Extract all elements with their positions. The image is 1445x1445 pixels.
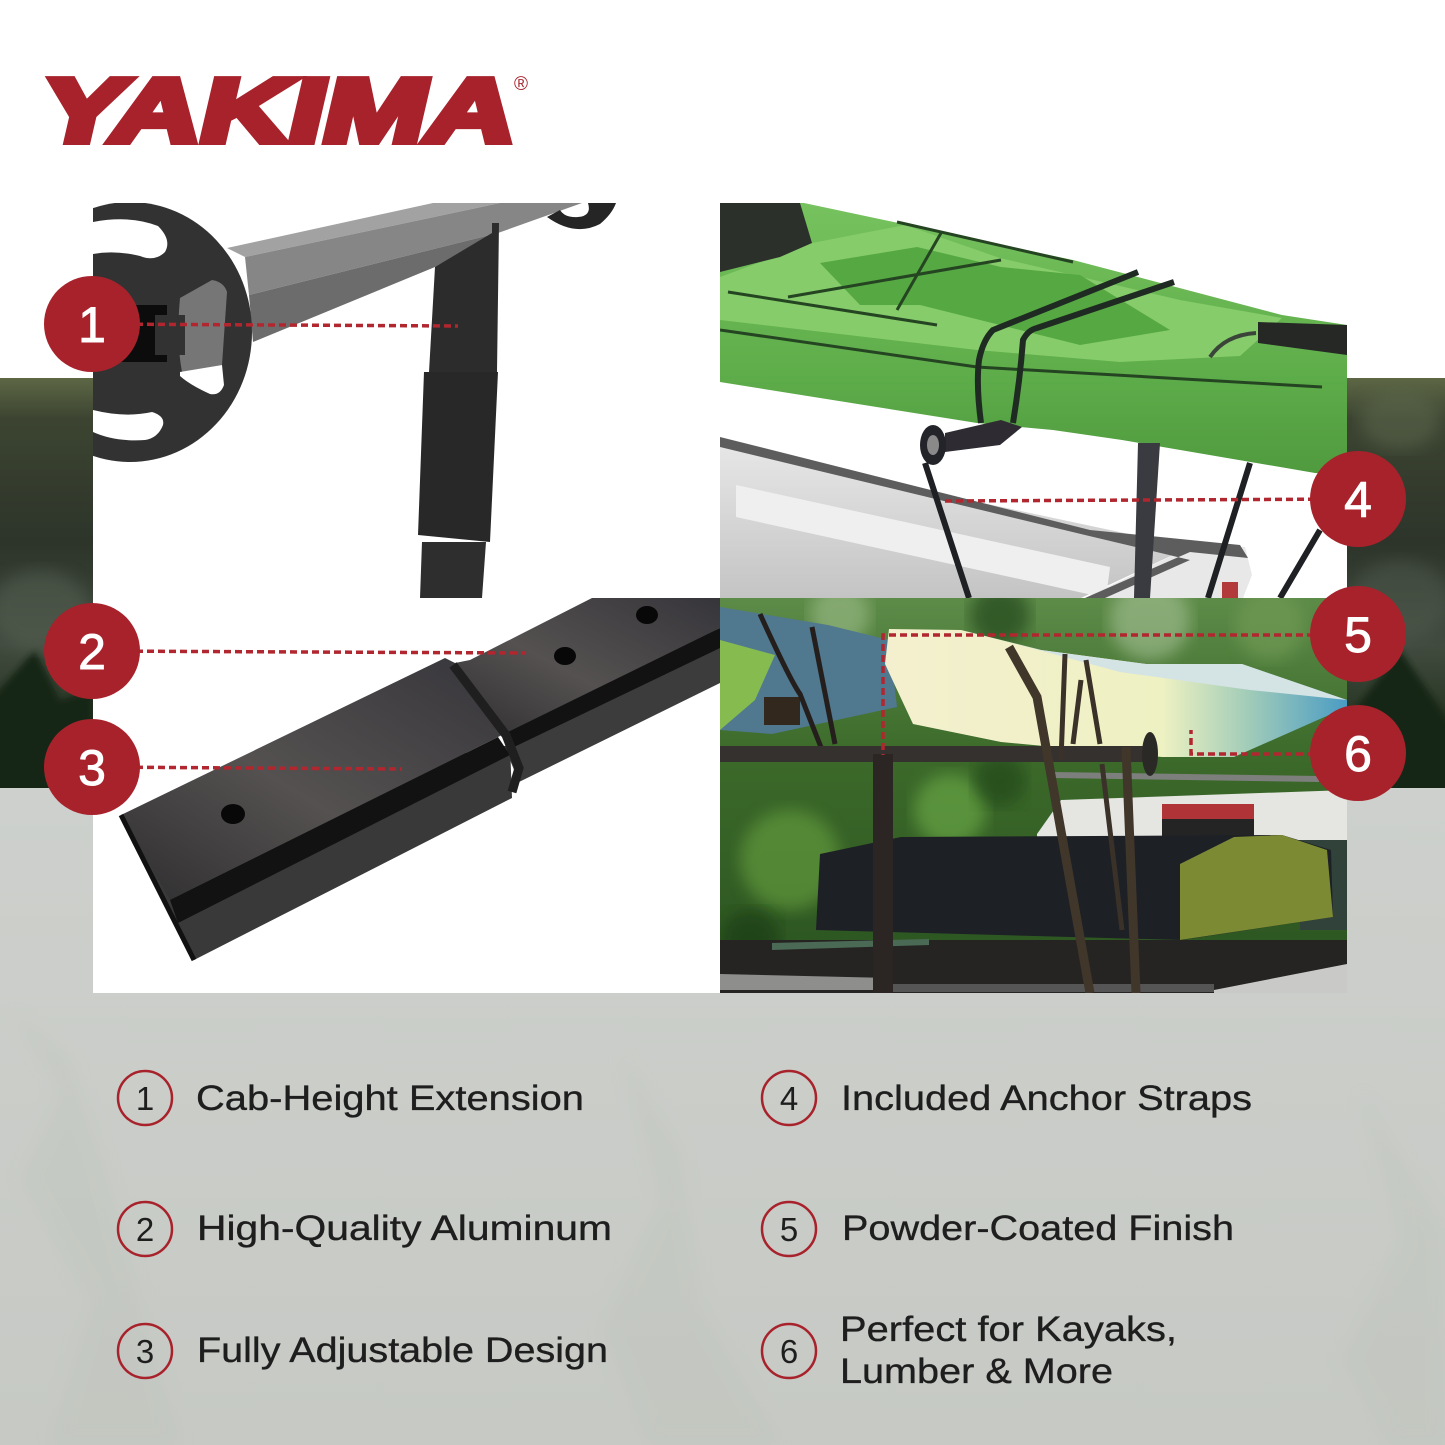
legend item 3: 3 [136,1333,154,1370]
panel: cab-height extension product photo [93,203,720,598]
foliage bokeh [720,580,1305,970]
badge 5 [1310,586,1406,682]
lower tube faces [121,745,512,960]
deck bungees [720,222,1322,387]
badge 3: 3 [78,740,106,796]
legend item 5: Powder-Coated Finish [842,1209,1234,1248]
end cap wheel [93,203,252,462]
kayak straps [978,272,1174,423]
legend item 6: Perfect for Kayaks, [840,1310,1177,1349]
legend item 4: Included Anchor Straps [841,1079,1252,1118]
panel: green kayak on truck photo [720,203,1347,598]
legend item 6 [762,1310,1177,1391]
badge 4: 4 [1344,472,1372,528]
left kayak [720,607,897,734]
legend item 3 [118,1324,608,1378]
callout line 3 [92,767,402,769]
logo: Yakima: YAKIMA [31,61,529,161]
badge 2: 2 [78,624,106,680]
extension upright [418,223,499,598]
straps [1009,647,1090,993]
cream kayak [885,629,1347,757]
legend item 6: 6 [780,1333,798,1370]
callout line 1 [92,324,458,326]
truck behind [1037,772,1347,930]
logo: Yakima: ® [514,74,528,95]
kayak hull [720,203,1347,475]
upright [873,754,893,993]
legend item 2: High-Quality Aluminum [197,1209,612,1248]
callout line 5 [883,635,1358,755]
badge 3 [44,719,140,815]
legend item 3: Fully Adjustable Design [197,1331,608,1370]
page background [0,378,1445,1445]
callout line 4 [945,499,1358,501]
legend item 1: Cab-Height Extension [196,1079,584,1118]
badge 2 [44,603,140,699]
legend item 6: Lumber & More [840,1352,1113,1391]
upper tube faces [121,658,501,864]
legend item 2: 2 [136,1211,154,1248]
legend item 2 [118,1202,612,1256]
crossbar [720,746,1148,762]
legend item 1: 1 [136,1080,154,1117]
legend item 5 [762,1202,1234,1256]
badge 1: 1 [78,297,106,353]
legend item 4 [762,1071,1252,1125]
badge 4 [1310,451,1406,547]
truck bed [720,437,1252,598]
holes [221,804,245,824]
badge 6 [1310,705,1406,801]
legend item 1 [118,1071,584,1125]
tent bag [816,835,1333,940]
panel: tube detail product photo [93,598,720,993]
open end [121,815,194,960]
legend item 4: 4 [780,1080,798,1117]
panel: cream kayak on rack outdoor photo [720,580,1347,993]
callout line 6 [1191,730,1358,754]
badge 1 [44,276,140,372]
badge 6: 6 [1344,726,1372,782]
truck bed [720,939,1347,993]
callout line 2 [92,651,525,653]
crossbar and wheel [945,420,1022,452]
dark band [170,737,510,923]
cockpit and gear [720,203,812,272]
legend item 5: 5 [780,1211,798,1248]
weld [453,665,519,792]
crossbar tube [227,203,582,342]
anchor straps and upright [925,463,1320,598]
far end wheel [547,203,616,229]
badge 5: 5 [1344,607,1372,663]
